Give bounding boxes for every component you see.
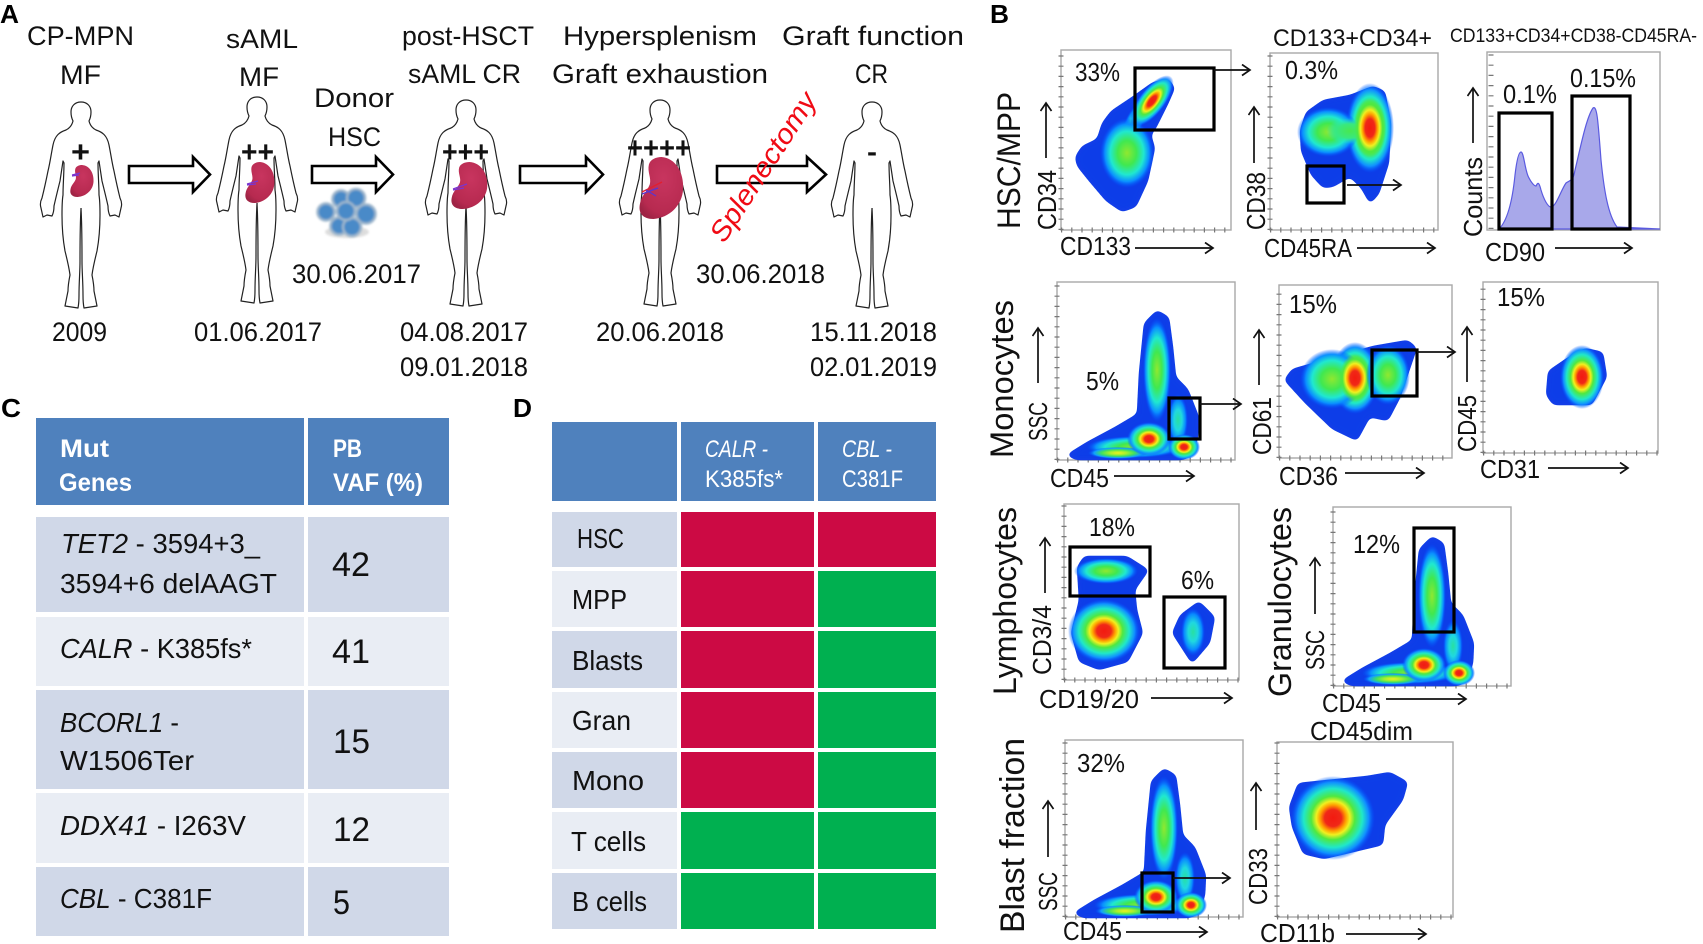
row: DDX41 bbox=[36, 793, 449, 863]
dates: 15.11.2018 and 02.01.2019 bbox=[810, 317, 937, 382]
body figure 1 with spleen bbox=[40, 102, 122, 308]
plot: CD19/20 vs CD3/4 lymphocytes bbox=[1027, 504, 1239, 714]
dates: 04.08.2017 and 09.01.2018: 04.08.2017 bbox=[400, 317, 528, 347]
row: B cells: B cells bbox=[572, 886, 647, 917]
row: TET2 bbox=[36, 517, 449, 612]
body figure 4 with enlarged spleen: ++++ bbox=[627, 132, 691, 165]
plot: CD45 vs SSC blast fraction: 32% bbox=[1077, 748, 1125, 778]
matrix header bbox=[552, 422, 936, 501]
label: Donor HSC: Donor bbox=[314, 83, 394, 113]
arrow 1 bbox=[129, 157, 210, 192]
row: CBL: 5 bbox=[333, 884, 350, 922]
row: B cells bbox=[552, 873, 936, 929]
plot: CD11b vs CD33: CD33 bbox=[1243, 848, 1273, 905]
row: CALR: CALR - K385fs* bbox=[60, 633, 252, 664]
date: 01.06.2017: 01.06.2017 bbox=[194, 317, 322, 347]
plot: CD133 vs CD34 bbox=[1032, 50, 1250, 261]
panel letter D: D bbox=[513, 393, 532, 423]
stage heading: post-HSCT sAML CR: post-HSCT bbox=[402, 21, 534, 51]
plot: CD133 vs CD34: CD133 bbox=[1060, 231, 1131, 261]
label: Donor HSC bbox=[314, 83, 394, 152]
date: splenectomy 30.06.2018: 30.06.2018 bbox=[696, 259, 825, 289]
plot: CD19/20 vs CD3/4 lymphocytes: CD19/20 bbox=[1039, 684, 1139, 714]
body figure 4 with enlarged spleen bbox=[619, 100, 701, 306]
plot: CD45 vs SSC granulocytes: SSC bbox=[1300, 630, 1330, 670]
plot: CD45 vs SSC blast fraction: SSC bbox=[1033, 872, 1063, 911]
stage heading: Hypersplenism Graft exhaustion: Hypersplenism bbox=[563, 21, 757, 51]
row: CBL bbox=[36, 867, 449, 936]
row: MPP: MPP bbox=[572, 584, 627, 615]
row: Blasts: Blasts bbox=[572, 645, 643, 676]
row: DDX41: 12 bbox=[333, 811, 370, 849]
body figure 1 with spleen: + bbox=[71, 136, 90, 169]
dates: 15.11.2018 and 02.01.2019: 02.01.2019 bbox=[810, 352, 937, 382]
plot: CD31 vs CD45 bbox=[1452, 282, 1658, 484]
row: Blasts bbox=[552, 631, 936, 688]
row: CALR bbox=[36, 617, 449, 686]
row label: Granulocytes: Granulocytes bbox=[1262, 507, 1298, 697]
stage heading: Graft function CR bbox=[782, 21, 964, 89]
row label: Blast fraction: Blast fraction bbox=[994, 738, 1032, 933]
plot: CD90 histogram: Counts bbox=[1458, 157, 1488, 237]
plot: CD45 vs SSC granulocytes bbox=[1300, 507, 1511, 718]
row: T cells: T cells bbox=[571, 826, 646, 857]
stage heading: sAML MF: MF bbox=[239, 62, 279, 92]
panel letter C: C bbox=[1, 393, 21, 423]
body figure 2 with spleen bbox=[216, 97, 298, 303]
row: BCORL1 bbox=[36, 690, 449, 789]
date: 20.06.2018: 20.06.2018 bbox=[596, 317, 724, 347]
panel B: flow cytometry bbox=[984, 0, 1697, 944]
row: Mono: Mono bbox=[572, 765, 644, 796]
icon: donor stem cells bbox=[318, 189, 376, 238]
plot: CD45 vs SSC monocytes: CD45 bbox=[1050, 463, 1109, 493]
row: Gran bbox=[552, 692, 936, 748]
body figure 2 with spleen: ++ bbox=[241, 136, 274, 169]
row: TET2: 42 bbox=[332, 546, 370, 584]
plot: CD45 vs SSC granulocytes: CD45 bbox=[1322, 688, 1381, 718]
plot: CD11b vs CD33 bbox=[1243, 716, 1453, 944]
row: BCORL1: 15 bbox=[333, 723, 370, 761]
stage heading: sAML MF: sAML bbox=[226, 24, 298, 54]
row: Mono bbox=[552, 752, 936, 808]
stage heading: CP-MPN MF: CP-MPN bbox=[27, 21, 134, 51]
row: CBL: CBL - C381F bbox=[60, 883, 212, 914]
plot: CD19/20 vs CD3/4 lymphocytes: CD3/4 bbox=[1027, 605, 1057, 675]
stage heading: post-HSCT sAML CR bbox=[402, 21, 534, 89]
stage heading: Graft function CR: Graft function bbox=[782, 21, 964, 51]
row: DDX41: DDX41 - I263V bbox=[60, 810, 246, 841]
row: TET2: TET2 - 3594+3_ bbox=[61, 528, 260, 559]
dates: 15.11.2018 and 02.01.2019: 15.11.2018 bbox=[810, 317, 937, 347]
matrix header: K385fs* bbox=[705, 466, 783, 493]
stage heading: Graft function CR: CR bbox=[855, 59, 888, 89]
plot: CD31 vs CD45: CD45 bbox=[1452, 395, 1482, 452]
stage heading: Hypersplenism Graft exhaustion bbox=[552, 21, 768, 89]
row: MPP bbox=[552, 571, 936, 627]
plot: CD36 vs CD61 bbox=[1247, 285, 1455, 491]
body figure 3 with spleen bbox=[425, 100, 507, 306]
plot: CD45 vs SSC monocytes: 5% bbox=[1086, 366, 1119, 396]
arrow 3 bbox=[520, 157, 603, 192]
plot: CD45 vs SSC blast fraction bbox=[1033, 740, 1243, 944]
plot: CD90 histogram: CD90 bbox=[1485, 237, 1545, 267]
row: BCORL1: BCORL1 - bbox=[60, 707, 179, 738]
label: Donor HSC: HSC bbox=[328, 122, 381, 152]
body figure 5 without spleen: - bbox=[867, 137, 877, 167]
matrix header: C381F bbox=[842, 466, 903, 493]
plot: CD19/20 vs CD3/4 lymphocytes: 6% bbox=[1181, 565, 1214, 595]
plot: CD133 vs CD34: CD34 bbox=[1032, 170, 1062, 230]
row: TET2: 3594+6 delAAGT bbox=[60, 568, 277, 599]
body figure 5 without spleen bbox=[831, 102, 913, 308]
plot: CD45 vs SSC monocytes bbox=[1023, 282, 1241, 493]
row: Gran: Gran bbox=[572, 705, 631, 736]
matrix header: CBL - bbox=[842, 436, 892, 463]
stage heading: CP-MPN MF: MF bbox=[60, 60, 101, 90]
dates: 04.08.2017 and 09.01.2018 bbox=[400, 317, 528, 382]
plot: CD31 vs CD45: 15% bbox=[1497, 282, 1545, 312]
plot: CD45RA vs CD38: CD38 bbox=[1241, 172, 1271, 230]
row label: Lymphocytes: Lymphocytes bbox=[987, 507, 1023, 695]
plot: CD45 vs SSC granulocytes: 12% bbox=[1353, 529, 1400, 559]
table header: PB bbox=[333, 435, 362, 463]
plot: CD31 vs CD45: CD31 bbox=[1480, 454, 1540, 484]
arrow 2 bbox=[312, 157, 393, 192]
row: HSC: HSC bbox=[577, 523, 624, 554]
subset title: CD133+CD34+ bbox=[1273, 25, 1432, 52]
row: T cells bbox=[552, 812, 936, 869]
plot: CD45RA vs CD38 bbox=[1241, 25, 1438, 263]
plot: CD36 vs CD61: 15% bbox=[1289, 289, 1337, 319]
stage heading: CP-MPN MF bbox=[27, 21, 134, 90]
row: BCORL1: W1506Ter bbox=[60, 745, 194, 776]
arrow 4 bbox=[717, 157, 826, 192]
plot: CD45RA vs CD38: CD45RA bbox=[1264, 233, 1353, 263]
row: CALR: 41 bbox=[332, 633, 370, 671]
subset title: CD45dim bbox=[1310, 716, 1413, 746]
row: HSC bbox=[552, 512, 936, 567]
plot: CD45RA vs CD38: 0.3% bbox=[1285, 55, 1338, 85]
plot: CD36 vs CD61: CD36 bbox=[1279, 461, 1338, 491]
date: HSCT 30.06.2017: 30.06.2017 bbox=[292, 259, 421, 289]
date: 2009: 2009 bbox=[52, 317, 107, 347]
stage heading: post-HSCT sAML CR: sAML CR bbox=[408, 59, 521, 89]
panel D: mutation by cell type matrix bbox=[513, 393, 936, 929]
plot: CD90 histogram bbox=[1450, 26, 1697, 267]
plot: CD19/20 vs CD3/4 lymphocytes: 18% bbox=[1089, 512, 1135, 542]
plot: CD90 histogram: 0.15% bbox=[1570, 63, 1636, 93]
stage heading: Hypersplenism Graft exhaustion: Graft exhaustion bbox=[552, 59, 768, 89]
dates: 04.08.2017 and 09.01.2018: 09.01.2018 bbox=[400, 352, 528, 382]
plot: CD45 vs SSC monocytes: SSC bbox=[1023, 402, 1053, 441]
table header: VAF (%) bbox=[333, 469, 423, 497]
plot: CD90 histogram: 0.1% bbox=[1503, 79, 1557, 109]
row label: Monocytes: Monocytes bbox=[984, 300, 1020, 458]
body figure 3 with spleen: +++ bbox=[442, 136, 489, 169]
plot: CD36 vs CD61: CD61 bbox=[1247, 397, 1277, 455]
table header: Genes bbox=[59, 469, 132, 497]
panel C: mutated genes table bbox=[1, 393, 449, 936]
table header: Mut bbox=[60, 435, 110, 463]
row label: HSC/MPP: HSC/MPP bbox=[991, 92, 1027, 229]
rotated label: Splenectomy: Splenectomy bbox=[703, 84, 824, 247]
stage heading: sAML MF bbox=[226, 24, 298, 92]
table header bbox=[36, 418, 449, 505]
panel A: clinical timeline bbox=[0, 0, 964, 382]
matrix header: CALR - bbox=[705, 436, 768, 463]
plot: CD133 vs CD34: 33% bbox=[1075, 57, 1120, 87]
